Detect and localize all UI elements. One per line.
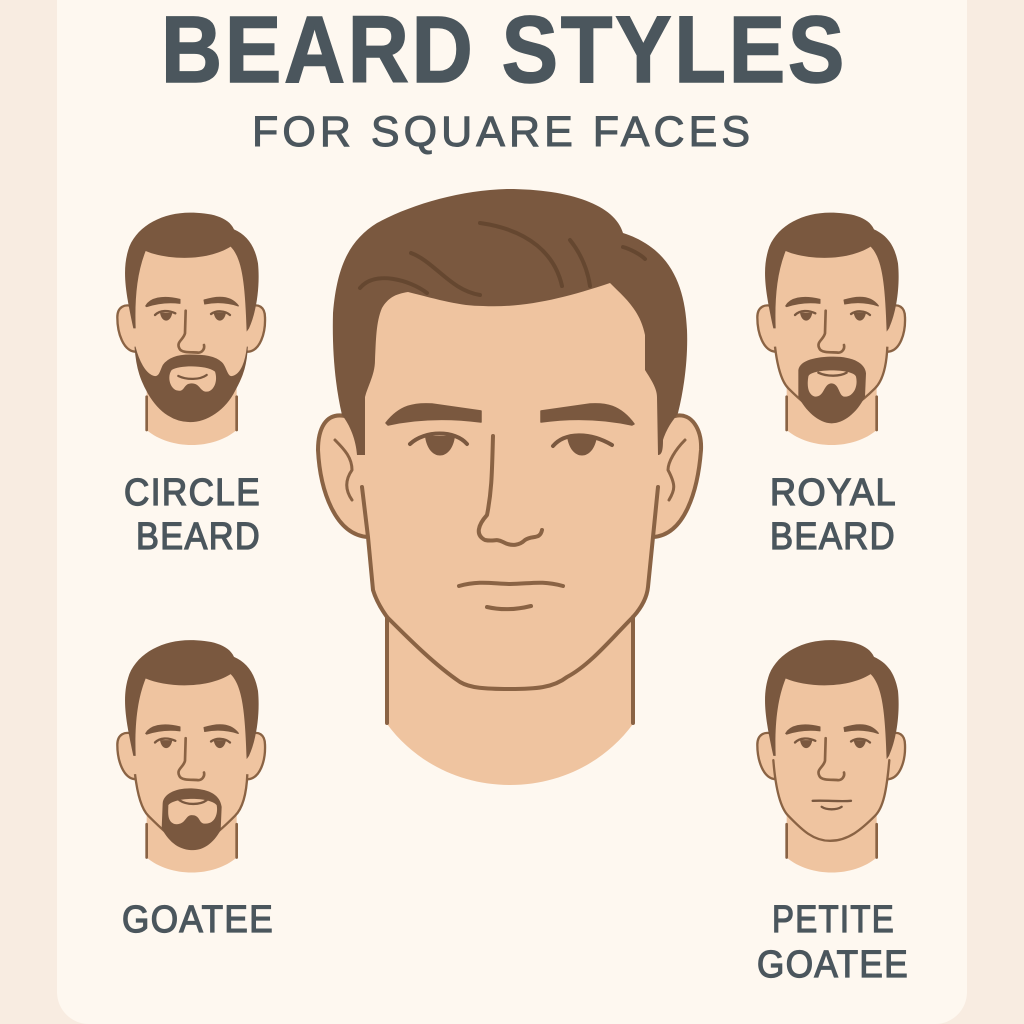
main face illustration [318, 189, 701, 785]
subtitle: FOR SQUARE FACES [252, 108, 750, 156]
label: circle beard [124, 472, 261, 558]
label: petite goatee: GOATEE [757, 944, 909, 986]
label: petite goatee [757, 899, 909, 986]
label: royal beard: ROYAL [770, 472, 897, 514]
eyes [410, 434, 612, 456]
left inner ear [335, 440, 352, 500]
face skin [362, 275, 660, 689]
title: BEARD STYLES [161, 0, 847, 103]
neck [387, 600, 633, 785]
mouth [459, 583, 563, 609]
right ear [640, 415, 701, 537]
jaw outline [362, 487, 658, 689]
portrait: petite goatee [757, 640, 905, 872]
left eyebrow [386, 404, 481, 425]
neck lines [387, 617, 633, 723]
nose [479, 436, 542, 545]
portrait: circle beard [117, 213, 265, 445]
portrait: royal beard [757, 213, 905, 445]
label: petite goatee: PETITE [772, 899, 895, 941]
label: circle beard: BEARD [136, 516, 261, 558]
portrait: goatee [117, 640, 265, 872]
label: goatee: GOATEE [122, 899, 274, 941]
left ear [318, 415, 380, 537]
right inner ear [668, 440, 685, 500]
label: circle beard: CIRCLE [124, 472, 261, 514]
right eyebrow [541, 404, 634, 425]
hair [333, 189, 687, 455]
label: royal beard [770, 472, 897, 558]
label: royal beard: BEARD [770, 516, 896, 558]
hair strands [360, 223, 645, 295]
